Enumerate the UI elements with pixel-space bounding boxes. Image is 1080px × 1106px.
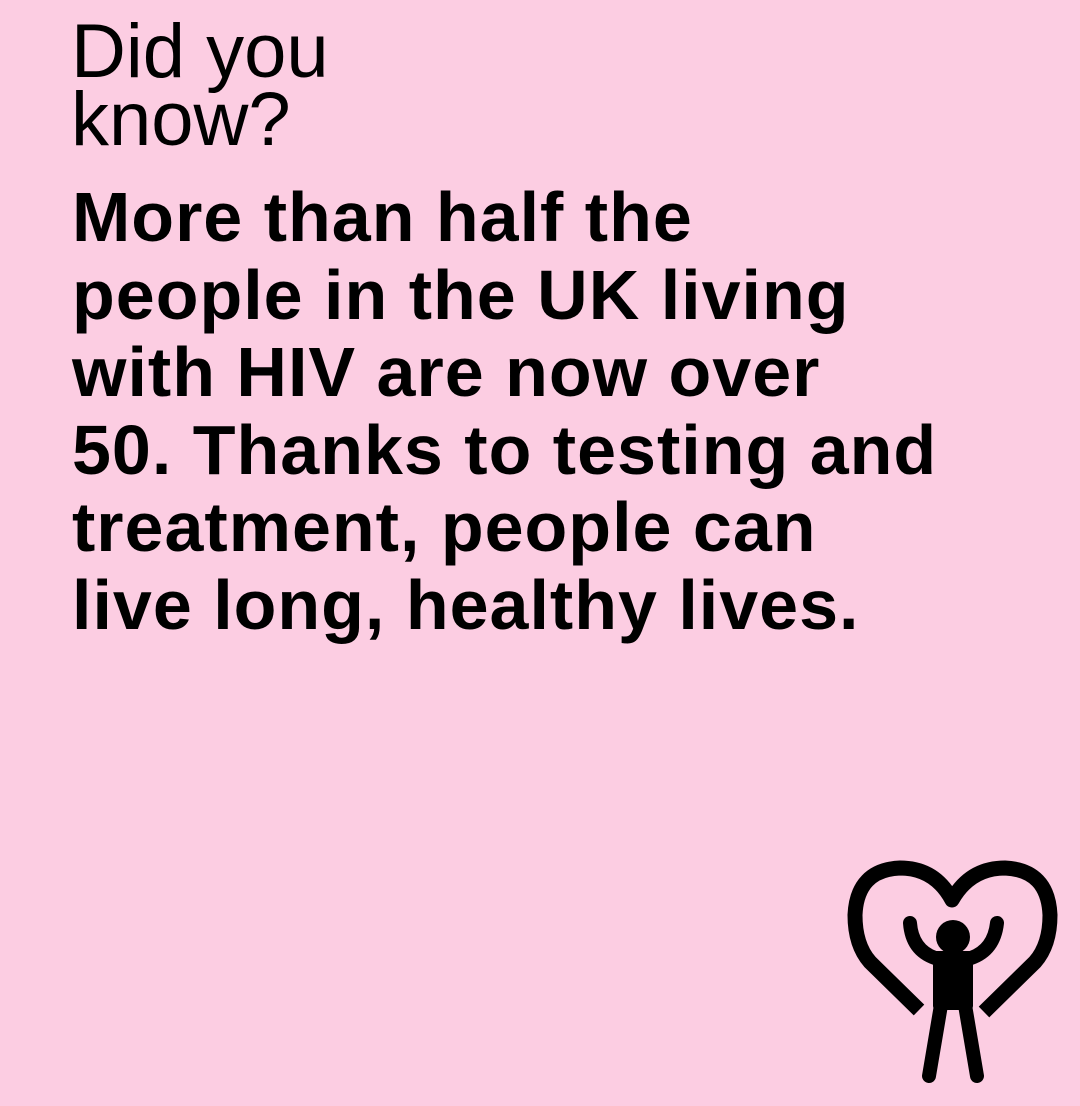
text block: main message: live long, healthy lives. (72, 566, 859, 644)
text block: main message: people in the UK living (72, 256, 849, 334)
heading: Did you know? (71, 9, 329, 162)
text block: main message (72, 178, 937, 644)
text block: main message: More than half the (72, 178, 693, 256)
text block: main message: with HIV are now over (72, 333, 820, 411)
heading: Did you know?: Did you (71, 9, 329, 94)
text block: main message: 50. Thanks to testing and (72, 411, 937, 489)
heading: Did you know?: know? (71, 77, 291, 162)
text block: main message: treatment, people can (72, 488, 817, 566)
